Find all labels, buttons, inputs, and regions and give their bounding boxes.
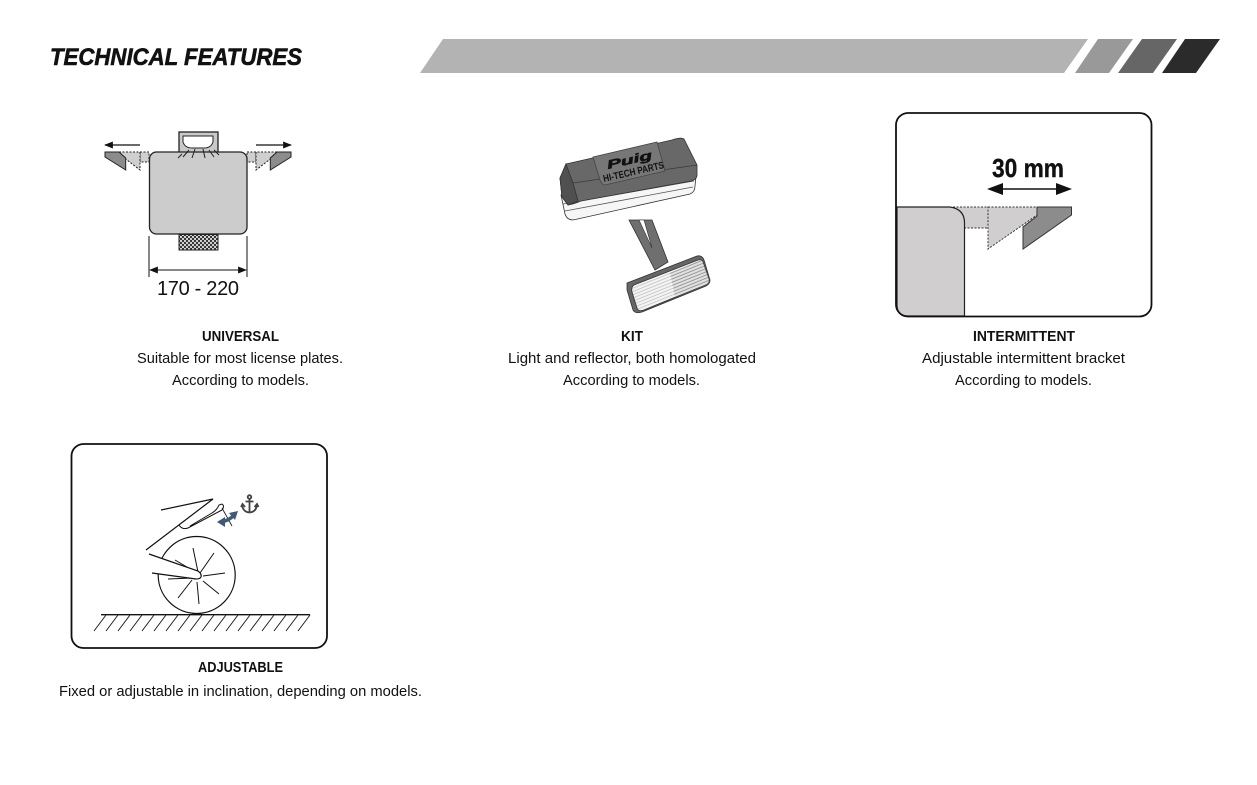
universal heading: UNIVERSAL [202,329,279,345]
icon: light and reflector kit: HI-TECH PARTS [602,160,665,185]
icon: 30 mm intermittent bracket [896,113,1152,316]
panel: kit [508,138,756,389]
icon: light and reflector kit [560,138,710,313]
kit description: According to models. [563,373,700,389]
panel: universal [105,132,343,389]
panel: adjustable [59,444,422,700]
intermittent description [922,351,1125,389]
universal description: Suitable for most license plates. [137,351,343,367]
icon: 30 mm intermittent bracket: 30 mm [992,153,1064,183]
icon: light and reflector kit: Puig [606,148,655,172]
universal description [137,351,343,389]
kit description [508,351,756,389]
adjustable heading: ADJUSTABLE [198,660,283,676]
title: TECHNICAL FEATURES [50,44,303,71]
intermittent heading: INTERMITTENT [973,329,1075,345]
kit heading: KIT [621,329,643,345]
panel: intermittent [896,113,1152,389]
universal description: According to models. [172,373,309,389]
adjustable description: Fixed or adjustable in inclination, depending on models. [59,684,422,700]
header stripe bars [420,39,1220,73]
kit description: Light and reflector, both homologated [508,351,756,367]
icon: universal plate diagram: 170 - 220 [157,278,239,300]
icon: adjustable inclination motorcycle [72,444,327,648]
intermittent description: Adjustable intermittent bracket [922,351,1125,367]
icon: universal plate diagram [105,132,291,300]
intermittent description: According to models. [955,373,1092,389]
